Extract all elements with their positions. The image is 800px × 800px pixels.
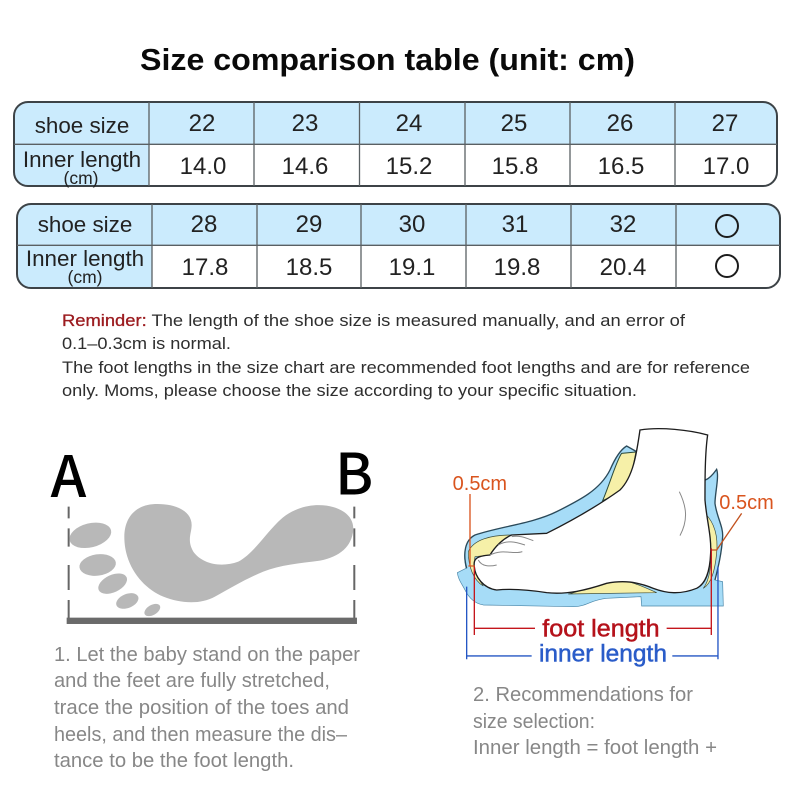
inner lengths row: 15.8 (492, 153, 538, 180)
icon: footprint sole (124, 504, 353, 602)
shoe sizes row: 23 (292, 110, 318, 137)
text: step 1 instructions: heels, and then measure the dis– (54, 724, 348, 746)
foot length dimension (474, 548, 711, 635)
row label: inner length (26, 246, 144, 287)
inner lengths row: 14.6 (282, 153, 328, 180)
panel: size table 22-27 (14, 102, 777, 188)
insole: tongue padding (603, 452, 636, 501)
heel gap marker (711, 513, 742, 550)
icon: empty length circle (716, 255, 738, 277)
row label: inner length: Inner length (26, 246, 144, 271)
inner lengths row (182, 254, 646, 281)
shoe sizes row (191, 211, 636, 238)
inner lengths row: 17.8 (182, 254, 228, 281)
title: Size comparison table (unit: cm) (140, 42, 635, 77)
text: step 1 instructions: 1. Let the baby stand on the paper (54, 644, 360, 666)
label: inner length: inner length (539, 640, 667, 667)
insole: toe padding (468, 535, 512, 586)
shoe sizes row: 24 (396, 110, 422, 137)
inner lengths row: 18.5 (286, 254, 332, 281)
text: step 2 recommendations: size selection: (473, 711, 595, 733)
text: step 2 recommendations: Inner length = foot length + (473, 737, 717, 759)
shoe sizes row: 26 (607, 110, 633, 137)
foot detail lines (478, 492, 686, 566)
row label: inner length: (cm) (68, 267, 102, 287)
inner lengths row: 19.1 (389, 254, 435, 281)
row label: inner length: Inner length (23, 147, 141, 172)
shoe sizes row (189, 110, 738, 137)
inner lengths row (180, 153, 749, 180)
label: 0.5cm toe: 0.5cm (453, 473, 507, 495)
label: foot length: foot length (542, 616, 660, 643)
shoe body (457, 446, 723, 607)
shoe sizes row: 28 (191, 211, 217, 238)
shoe sizes row: 27 (712, 110, 738, 137)
inner lengths row: 14.0 (180, 153, 226, 180)
label A: A (51, 431, 87, 514)
insole: heel padding (703, 513, 717, 588)
shoe sizes row: 30 (399, 211, 425, 238)
label: 0.5cm heel: 0.5cm (719, 492, 774, 514)
inner lengths row: 17.0 (703, 153, 749, 180)
reminder text block: only. Moms, please choose the size according to your specific situation. (62, 382, 637, 400)
baseline bar (67, 618, 357, 624)
text: step 2 recommendations: 2. Recommendations for (473, 684, 693, 706)
shoe sizes row: 31 (502, 211, 528, 238)
label B: B (335, 429, 373, 512)
shoe sizes row: 22 (189, 110, 215, 137)
reminder text block: Reminder: The length of the shoe size is measured manually, and an error of (62, 312, 685, 330)
inner length dimension (467, 567, 718, 659)
text: step 1 instructions: trace the position of the toes and (54, 697, 349, 719)
shoe outline (465, 446, 723, 580)
inner lengths row: 20.4 (600, 254, 646, 281)
row label: inner length: (cm) (64, 168, 98, 188)
text: step 2 recommendations (473, 684, 717, 759)
panel: size table 28-32 (17, 204, 780, 288)
row label: shoe size: shoe size (38, 212, 132, 237)
inner lengths row: 19.8 (494, 254, 540, 281)
reminder text block: 0.1–0.3cm is normal. (62, 335, 231, 353)
shoe sizes row: 25 (501, 110, 527, 137)
reminder text block: The foot lengths in the size chart are recommended foot lengths and are for reference (62, 359, 750, 377)
icon: empty size circle (716, 215, 738, 237)
row label: shoe size: shoe size (35, 113, 129, 138)
text: step 1 instructions: tance to be the foot length. (54, 750, 294, 772)
text: step 1 instructions: and the feet are fully stretched, (54, 670, 330, 692)
text: step 1 instructions (54, 644, 360, 772)
shoe sizes row: 29 (296, 211, 322, 238)
row label: inner length (23, 147, 141, 188)
toe gap marker (468, 494, 475, 567)
shoe sizes row: 32 (610, 211, 636, 238)
diagram: footprint measurement (51, 429, 373, 624)
foot (474, 429, 711, 593)
icon: toes (67, 519, 162, 619)
reminder text block (62, 312, 750, 400)
insole: arch (568, 580, 657, 594)
inner lengths row: 15.2 (386, 153, 432, 180)
dashed guide lines (69, 507, 354, 618)
inner lengths row: 16.5 (598, 153, 644, 180)
diagram: foot in shoe cross-section (453, 429, 774, 667)
